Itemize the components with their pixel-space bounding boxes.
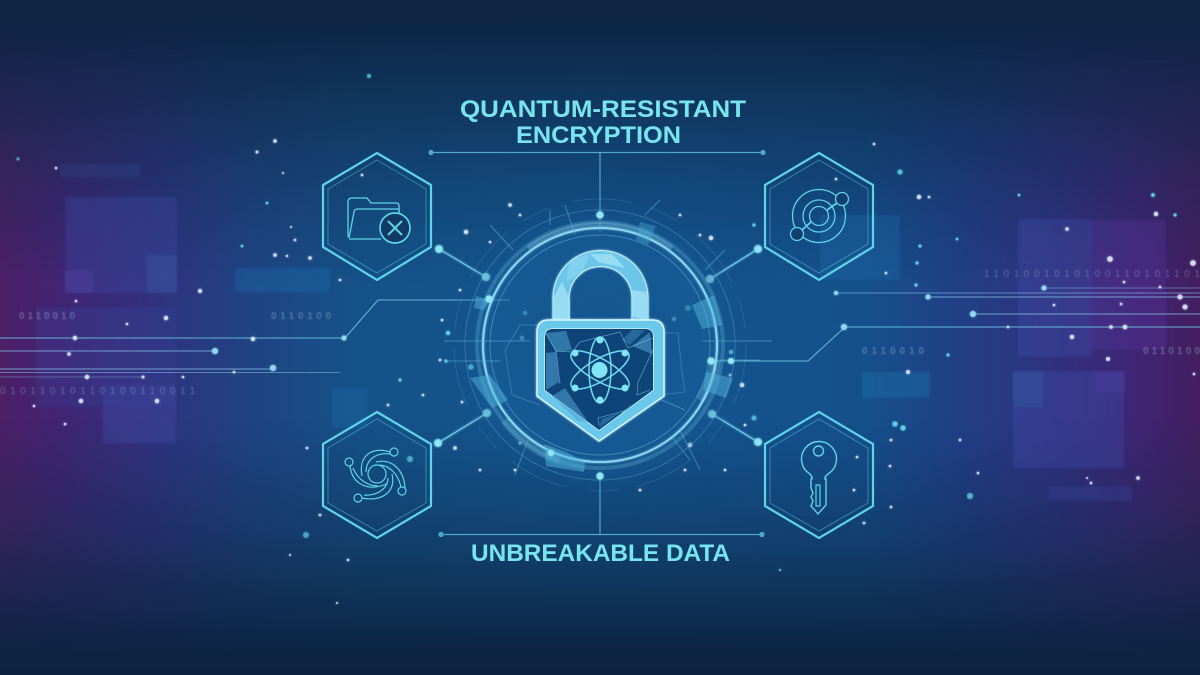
lock shackle — [561, 258, 640, 325]
lock body — [537, 320, 664, 441]
title: ENCRYPTION — [516, 122, 681, 149]
icon: spiral vortex hexagon — [323, 412, 431, 538]
data lines: left — [0, 300, 490, 377]
icon: folder with x hexagon — [323, 153, 431, 280]
body crack lines — [545, 332, 653, 425]
glow disc — [450, 195, 750, 495]
icon: key hexagon — [765, 412, 873, 538]
title — [460, 96, 746, 149]
binary strings: 0110010 — [862, 346, 924, 357]
data lines: right — [710, 288, 1200, 361]
circuit ticks — [444, 200, 772, 475]
title: QUANTUM-RESISTANT — [460, 96, 746, 123]
icon: orbital rings hexagon — [765, 153, 873, 280]
subtitle connector — [439, 476, 764, 536]
shackle facets — [553, 254, 647, 320]
central lock emblem — [444, 195, 772, 495]
binary strings: 0110100 — [271, 311, 331, 322]
body facets — [546, 330, 652, 428]
concentric rings — [454, 199, 746, 491]
icon: atom — [566, 336, 634, 404]
hexagon connector lines — [434, 246, 762, 446]
particles — [16, 74, 1196, 604]
line nodes — [212, 286, 1046, 371]
title connector — [429, 150, 765, 214]
ring nodes — [486, 212, 734, 480]
binary strings: 01011010110100110011 — [0, 386, 195, 397]
binary strings — [0, 269, 1200, 397]
translucent squares: left — [36, 164, 368, 443]
binary strings: 0110010 — [19, 311, 75, 322]
binary strings: 1101001010100110101101 — [984, 269, 1200, 280]
translucent squares: right — [820, 215, 1166, 501]
binary strings: 0110100 — [1143, 346, 1200, 357]
ring fragments — [470, 222, 733, 472]
body interior — [545, 329, 653, 430]
subtitle: UNBREAKABLE DATA — [471, 540, 730, 567]
